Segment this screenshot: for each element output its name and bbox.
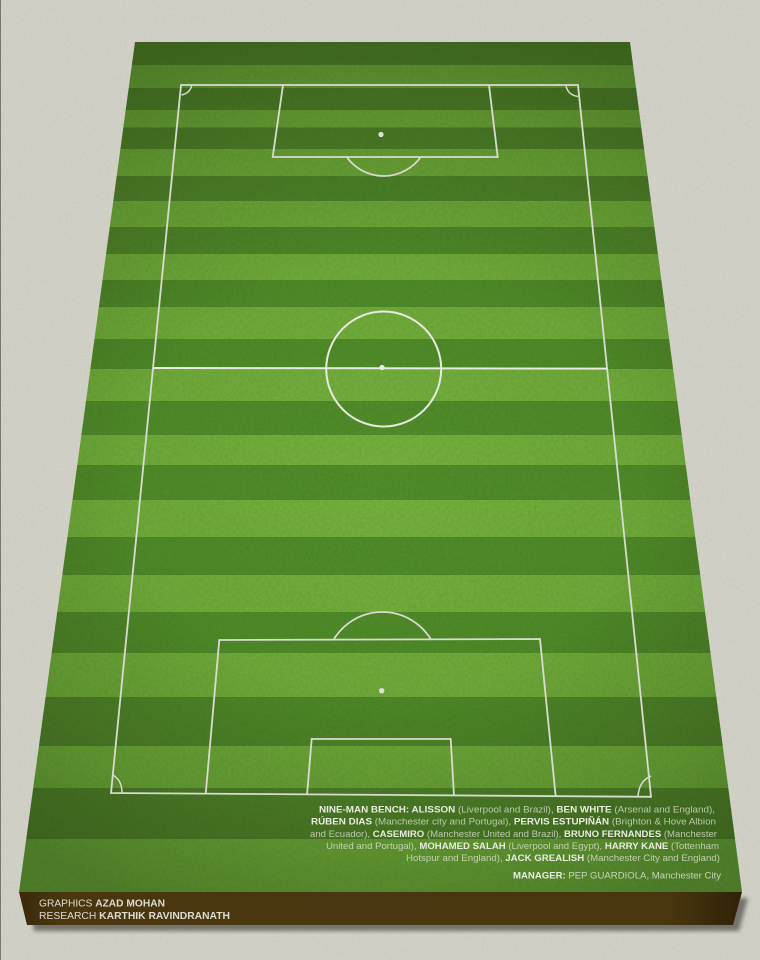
bench and manager text: MANAGER: PEP GUARDIOLA, Manchester City xyxy=(513,871,721,882)
bottom penalty spot xyxy=(379,688,384,693)
bench and manager text: United and Portugal), MOHAMED SALAH (Liverpool and Egypt), HARRY KANE (Tottenham xyxy=(326,841,719,852)
halfway line xyxy=(153,367,607,370)
bench and manager text: NINE-MAN BENCH: ALISSON (Liverpool and Brazil), BEN WHITE (Arsenal and England), xyxy=(319,804,715,816)
credits: GRAPHICS AZAD MOHAN xyxy=(39,898,165,910)
side face of pitch block xyxy=(19,892,742,925)
top penalty arc xyxy=(347,157,421,176)
goal box xyxy=(307,739,454,796)
bench and manager text: RÚBEN DIAS (Manchester city and Portugal), PERVIS ESTUPIÑÁN (Brighton & Hove Albion xyxy=(311,816,716,828)
bench and manager text xyxy=(310,804,721,882)
bench and manager text: and Ecuador), CASEMIRO (Manchester United and Brazil), BRUNO FERNANDES (Manchester xyxy=(310,829,717,840)
top penalty spot xyxy=(378,132,384,137)
credits xyxy=(39,898,230,922)
bench and manager text: Hotspur and England), JACK GREALISH (Manchester City and England) xyxy=(406,853,720,864)
bottom penalty arc xyxy=(334,612,431,639)
centre circle xyxy=(326,312,441,426)
centre spot xyxy=(379,365,385,370)
credits: RESEARCH KARTHIK RAVINDRANATH xyxy=(39,910,230,922)
bottom penalty box xyxy=(206,639,556,796)
drop shadow of pitch block xyxy=(30,898,748,931)
bottom corner arcs xyxy=(113,775,651,796)
top corner arcs xyxy=(182,86,578,96)
touchlines and goal lines xyxy=(111,85,651,797)
top penalty box xyxy=(273,85,498,157)
pitch markings xyxy=(111,85,651,797)
